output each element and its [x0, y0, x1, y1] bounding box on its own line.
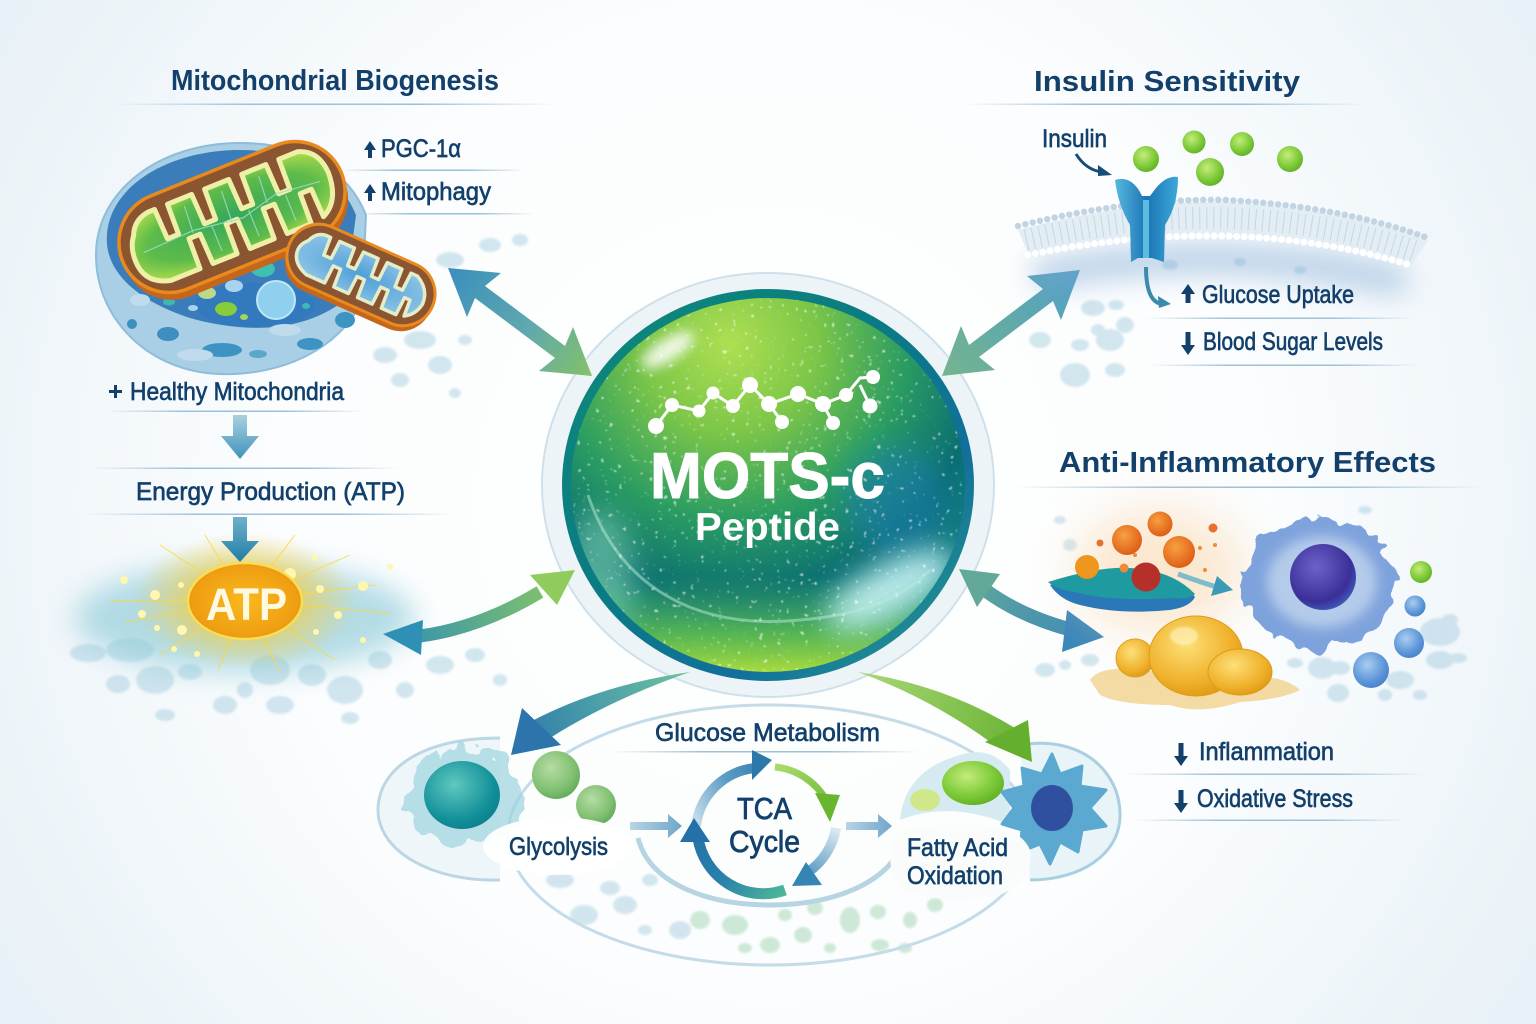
arrow: insulin sensitivity to MOTS-c [942, 270, 1080, 376]
icon: glycolysis cell [407, 747, 616, 843]
label: cycle: Cycle [729, 824, 800, 859]
title: MOTS-c: MOTS-c [650, 439, 885, 512]
icon: inflammatory particles [1075, 512, 1218, 592]
icon: glucose molecules [1133, 130, 1303, 186]
icon: fatty acid cell [900, 752, 1106, 864]
label: energy production: Energy Production (ATP) [136, 478, 405, 506]
icon: TCA cycle ring [680, 750, 840, 894]
label: fatty acid oxidation: Fatty Acid [907, 834, 1008, 862]
icon: large green mitochondrion [104, 126, 363, 315]
heading: anti-inflammatory effects: Anti-Inflammatory Effects [1059, 447, 1436, 479]
icon: peptide molecule [648, 370, 880, 434]
arrow: MOTS-c to fatty acid oxidation [858, 672, 1032, 762]
icon: small particles [1353, 561, 1432, 688]
icon: ATP burst [75, 533, 415, 673]
icon: glucose bubble [257, 281, 295, 319]
label: PGC-1 alpha: PGC-1α [381, 135, 461, 163]
subtitle: Peptide: Peptide [695, 506, 840, 549]
arrow: TCA to fatty acid [846, 814, 892, 838]
icon: insulin receptor [1115, 177, 1178, 262]
panel: anti-inflammatory effects [1015, 447, 1485, 821]
watercolor spots [70, 234, 1467, 953]
panel: MOTS-c sphere [542, 273, 994, 697]
heading: insulin sensitivity: Insulin Sensitivity [1034, 66, 1300, 98]
arrow: MOTS-c to glycolysis [511, 672, 690, 755]
label: glucose uptake: Glucose Uptake [1202, 281, 1354, 309]
icon: cell with mitochondria [96, 126, 445, 374]
arrow: down to energy production [221, 415, 259, 459]
label: inflammation: Inflammation [1199, 738, 1334, 766]
panel: insulin sensitivity [965, 66, 1428, 366]
label: fatty acid oxidation [890, 824, 1031, 899]
arrow: biogenesis to MOTS-c [448, 268, 592, 376]
arrow: ATP to MOTS-c [383, 570, 575, 655]
icon: small blue mitochondrion [274, 214, 445, 341]
arrow: particles to immune cell [1178, 574, 1233, 596]
arrow: anti-inflammatory to MOTS-c [959, 569, 1104, 652]
arrow: glycolysis to TCA [630, 814, 682, 838]
heading: glucose metabolism: Glucose Metabolism [655, 719, 880, 747]
icon: inflamed cell surface [1048, 568, 1195, 612]
icon: lipid droplets [1090, 616, 1300, 709]
orange glow [1075, 510, 1245, 630]
label: oxidative stress: Oxidative Stress [1197, 785, 1353, 813]
label: insulin: Insulin [1042, 125, 1107, 153]
heading: mitochondrial biogenesis: Mitochondrial Biogenesis [171, 65, 499, 97]
icon: cell membrane [1018, 200, 1428, 295]
label: glycolysis: Glycolysis [509, 833, 608, 861]
outer bubble outlines [378, 705, 1120, 965]
arrow: insulin to receptor [1076, 154, 1112, 176]
label: blood sugar levels: Blood Sugar Levels [1203, 328, 1383, 356]
label: ATP: ATP [206, 579, 287, 630]
arrow: receptor to glucose uptake [1146, 267, 1171, 308]
panel: glucose metabolism [378, 705, 1120, 965]
label: glycolysis [483, 817, 633, 875]
icon: immune cell [1242, 517, 1398, 649]
label: healthy mitochondria: Healthy Mitochondria [130, 378, 344, 406]
label: fatty acid oxidation: Oxidation [907, 862, 1003, 890]
arrow: down to ATP [221, 517, 259, 562]
label: mitophagy: Mitophagy [381, 178, 491, 206]
label: TCA: TCA [737, 791, 792, 826]
